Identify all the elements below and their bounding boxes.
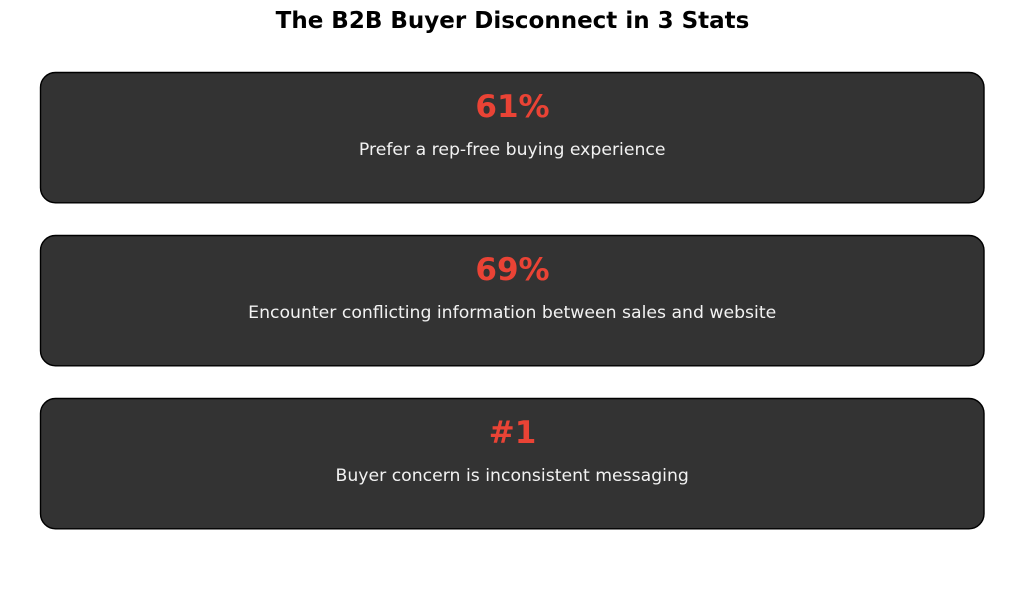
title: The B2B Buyer Disconnect in 3 Stats bbox=[276, 8, 749, 34]
panel: #1 stat bbox=[40, 398, 984, 529]
stat description: inconsistent messaging: Buyer concern is inconsistent messaging bbox=[336, 466, 689, 486]
panel: 69% stat bbox=[40, 236, 984, 366]
stat description: conflicting information: Encounter conflicting information between sales and website bbox=[248, 303, 776, 323]
stat number: 69%: 69% bbox=[475, 252, 550, 288]
stat number: 61%: 61% bbox=[475, 89, 550, 125]
stat number: #1: #1 bbox=[489, 415, 536, 451]
stat description: rep-free: Prefer a rep-free buying experience bbox=[359, 140, 665, 160]
panel: 61% stat bbox=[40, 72, 984, 203]
